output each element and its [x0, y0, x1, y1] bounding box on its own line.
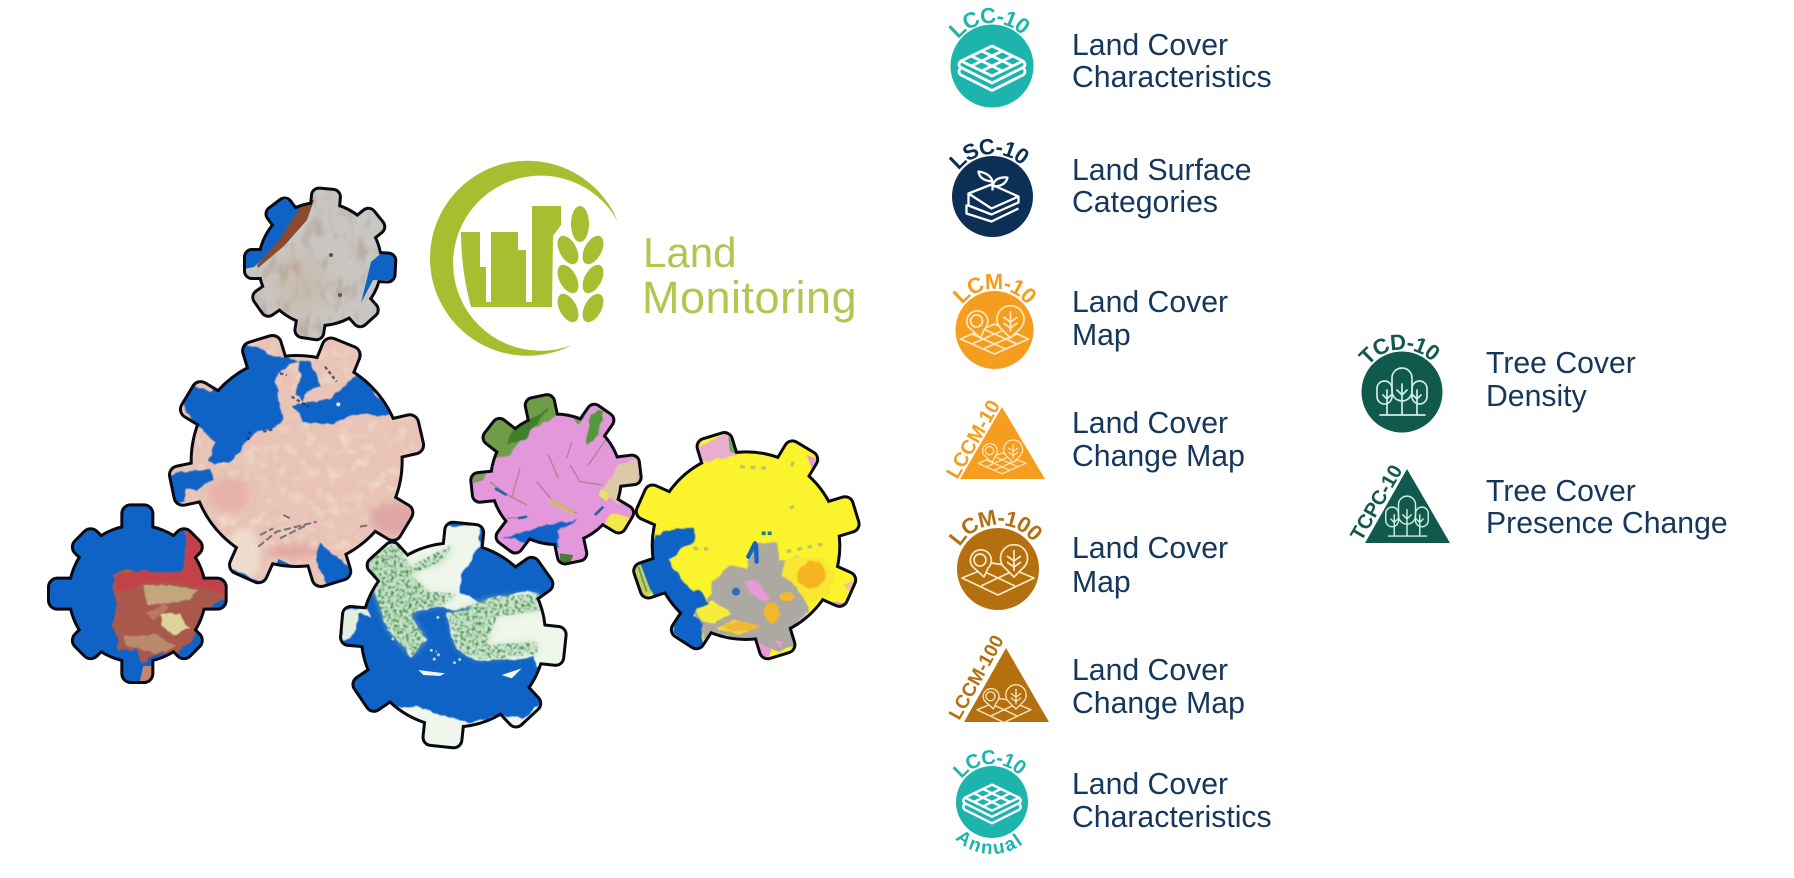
- icon: LCCM-100: LCCM-100: [945, 632, 1009, 723]
- label: Change Map: [1072, 440, 1245, 473]
- logo buildings: [461, 206, 561, 307]
- item: LCCM-10 Land Cover Change Map: [943, 396, 1245, 482]
- icon: LCC-10: [948, 8, 1034, 108]
- label: Presence Change: [1486, 507, 1728, 540]
- item: LSC-10 Land Surface Categories: [948, 138, 1252, 237]
- label: Land Cover: [1072, 29, 1228, 62]
- icon: LCC-10 Annual: Annual: [955, 832, 1022, 854]
- icon: LCC-10 Annual: LCC-10: [952, 750, 1026, 778]
- item: LCM-100 Land Cover Map: [948, 510, 1228, 610]
- logo wheat ear: [553, 206, 608, 326]
- item: TCD-10 Tree Cover Density: [1358, 334, 1636, 432]
- item: LCC-10 Annual Land Cover Characteristics: [952, 750, 1272, 854]
- gear: satellite imagery Iberia red: [47, 503, 228, 684]
- icon: LSC-10: [948, 138, 1033, 237]
- label: Map: [1072, 319, 1131, 352]
- icon: LCM-10: [952, 274, 1036, 369]
- label: Change Map: [1072, 687, 1245, 720]
- icon: LCM-100: [948, 510, 1042, 610]
- icon: LCCM-10: LCCM-10: [943, 396, 1005, 482]
- item: LCM-10 Land Cover Map: [952, 274, 1228, 369]
- item: LCCM-100 Land Cover Change Map: [945, 632, 1245, 723]
- icon: TCPC-10: TCPC-10: [1347, 461, 1407, 544]
- icon: LCC-10 Annual: [952, 750, 1028, 854]
- icon: LCM-100: LCM-100: [948, 510, 1042, 546]
- item: LCC-10 Land Cover Characteristics: [948, 8, 1272, 108]
- label: Land Surface: [1072, 154, 1252, 187]
- icon: TCD-10: TCD-10: [1358, 334, 1440, 362]
- gear: land cover map yellow: [632, 431, 861, 660]
- label: Land Cover: [1072, 768, 1228, 801]
- label: Tree Cover: [1486, 475, 1636, 508]
- icon: LSC-10: LSC-10: [948, 138, 1028, 170]
- icon: LCC-10: LCC-10: [948, 8, 1030, 38]
- label: Land Cover: [1072, 532, 1228, 565]
- logo crescent: [430, 161, 618, 356]
- icon: LCCM-10: [943, 396, 1045, 482]
- gear: land surface map orchid: [469, 393, 643, 566]
- icon: LCCM-100: [945, 632, 1049, 723]
- gear: tree cover Greece and Turkey: [339, 520, 568, 750]
- icon: TCPC-10: [1347, 461, 1450, 544]
- logo wordmark: Monitoring: [642, 272, 857, 323]
- logo: Land Monitoring: [430, 161, 857, 356]
- gear: satellite imagery central Europe pink: [168, 334, 426, 588]
- icon: LCM-10: LCM-10: [952, 274, 1036, 304]
- label: Map: [1072, 566, 1131, 599]
- label: Categories: [1072, 186, 1218, 219]
- label: Land Cover: [1072, 654, 1228, 687]
- label: Land Cover: [1072, 286, 1228, 319]
- icon: TCD-10: [1358, 334, 1442, 432]
- logo wordmark: Land: [643, 229, 736, 276]
- label: Land Cover: [1072, 407, 1228, 440]
- label: Tree Cover: [1486, 347, 1636, 380]
- gear: satellite imagery top grey: [243, 186, 398, 342]
- label: Characteristics: [1072, 61, 1272, 94]
- label: Characteristics: [1072, 801, 1272, 834]
- label: Density: [1486, 380, 1588, 413]
- item: TCPC-10 Tree Cover Presence Change: [1347, 461, 1728, 544]
